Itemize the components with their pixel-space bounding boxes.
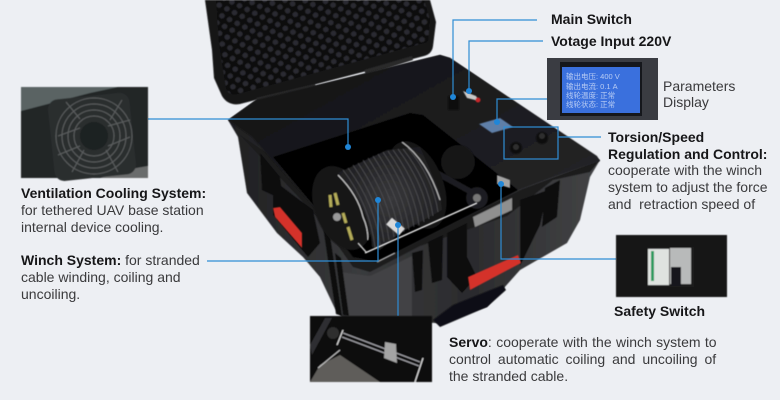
inset: safety switch	[616, 235, 727, 297]
winch rail	[358, 203, 477, 262]
inset: LCD display: 输出电流: 0.1 A	[566, 81, 618, 91]
label: ventilation cooling system: internal device cooling.	[21, 219, 163, 235]
rib shadows	[260, 153, 560, 316]
inset: LCD display: 线轮状态: 正常	[566, 99, 615, 109]
label: servo: Servo: cooperate with the winch system to	[449, 334, 717, 350]
rim of the case	[240, 135, 600, 272]
case top panel and opening	[228, 55, 600, 262]
label: main switch: Main Switch	[551, 11, 632, 27]
bottom carry handle	[433, 285, 506, 327]
label: torsion/speed regulation	[608, 129, 768, 212]
label: torsion/speed regulation: system to adjust the force	[608, 179, 768, 195]
label: safety switch: Safety Switch	[614, 303, 705, 319]
label: servo	[449, 334, 717, 384]
inset: servo	[310, 316, 432, 382]
inset: LCD display	[547, 58, 658, 120]
label: ventilation cooling system	[21, 185, 206, 235]
label: ventilation cooling system: for tethered UAV base station	[21, 202, 204, 218]
inset: LCD display: 输出电压: 400 V	[566, 71, 620, 81]
label: ventilation cooling system: Ventilation Cooling System:	[21, 185, 206, 201]
inset: cooling fan	[21, 87, 148, 182]
label: winch system: Winch System: for stranded	[21, 252, 200, 268]
label: servo: the stranded cable.	[449, 368, 568, 384]
label: torsion/speed regulation: and retraction speed of	[608, 196, 755, 212]
case body	[228, 55, 600, 323]
label: winch system: uncoiling.	[21, 286, 80, 302]
callout lines	[148, 20, 616, 316]
label: parameters display	[663, 78, 735, 110]
label: winch system	[21, 252, 200, 302]
callout dots	[345, 88, 504, 228]
panel hardware: main switch, socket, display, knobs	[448, 91, 548, 188]
label: winch system: cable winding, coiling and	[21, 269, 181, 285]
cable spool	[300, 133, 488, 259]
label: torsion/speed regulation: Torsion/Speed	[608, 129, 704, 145]
label: servo: control automatic coiling and uncoiling of	[449, 351, 716, 367]
label: parameters display: Display	[663, 94, 709, 110]
label: parameters display: Parameters	[663, 78, 735, 94]
inset: LCD display: 线轮温度: 正常	[566, 90, 615, 100]
red handles	[273, 207, 521, 290]
label: voltage input: Votage Input 220V	[551, 33, 672, 49]
case lid with foam	[205, 0, 436, 106]
label: torsion/speed regulation: cooperate with the winch	[608, 162, 762, 178]
label: torsion/speed regulation: Regulation and Control:	[608, 146, 767, 162]
